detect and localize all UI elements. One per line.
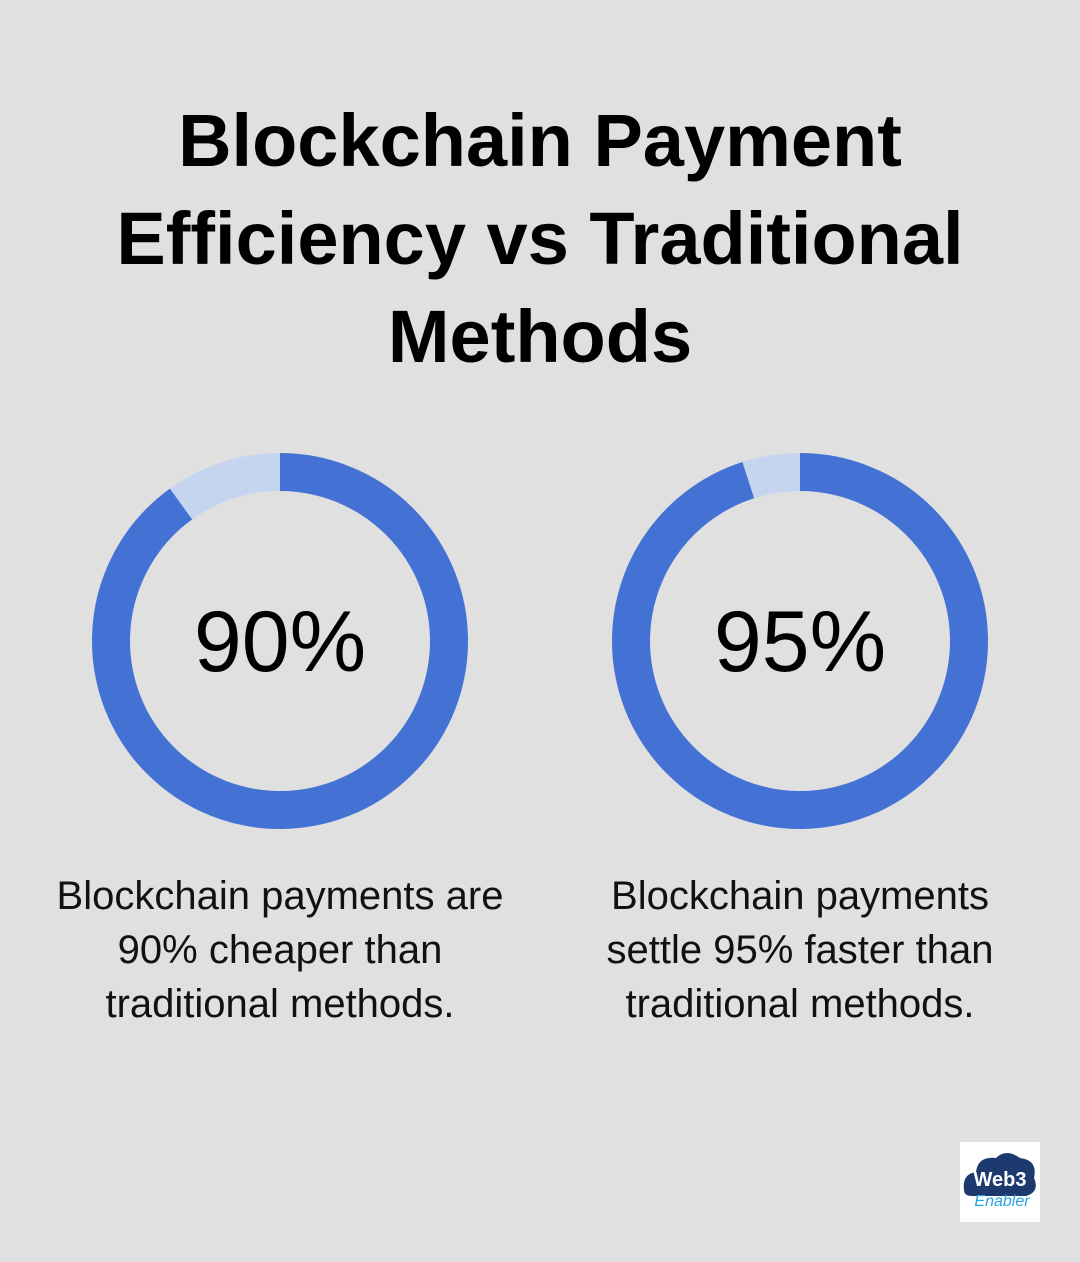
caption: faster: settle 95% faster than <box>607 928 993 972</box>
logo: Web3 <box>974 1169 1026 1191</box>
caption: faster <box>607 874 993 1026</box>
caption: cheaper: traditional methods. <box>105 982 455 1026</box>
caption: cheaper <box>57 874 503 1026</box>
logo: Enabler <box>974 1193 1030 1210</box>
logo <box>960 1142 1040 1222</box>
caption: cheaper: Blockchain payments are <box>57 874 503 918</box>
title: Blockchain Payment <box>178 99 902 182</box>
donut: 95%: 95% <box>714 594 886 690</box>
caption: cheaper: 90% cheaper than <box>118 928 442 972</box>
donut: 90% <box>92 453 468 829</box>
donut: 95% <box>612 453 988 829</box>
title <box>116 99 964 378</box>
title: Methods <box>388 295 692 378</box>
donut: 90%: 90% <box>194 594 366 690</box>
caption: faster: traditional methods. <box>625 982 975 1026</box>
title: Efficiency vs Traditional <box>116 197 964 280</box>
caption: faster: Blockchain payments <box>611 874 989 918</box>
